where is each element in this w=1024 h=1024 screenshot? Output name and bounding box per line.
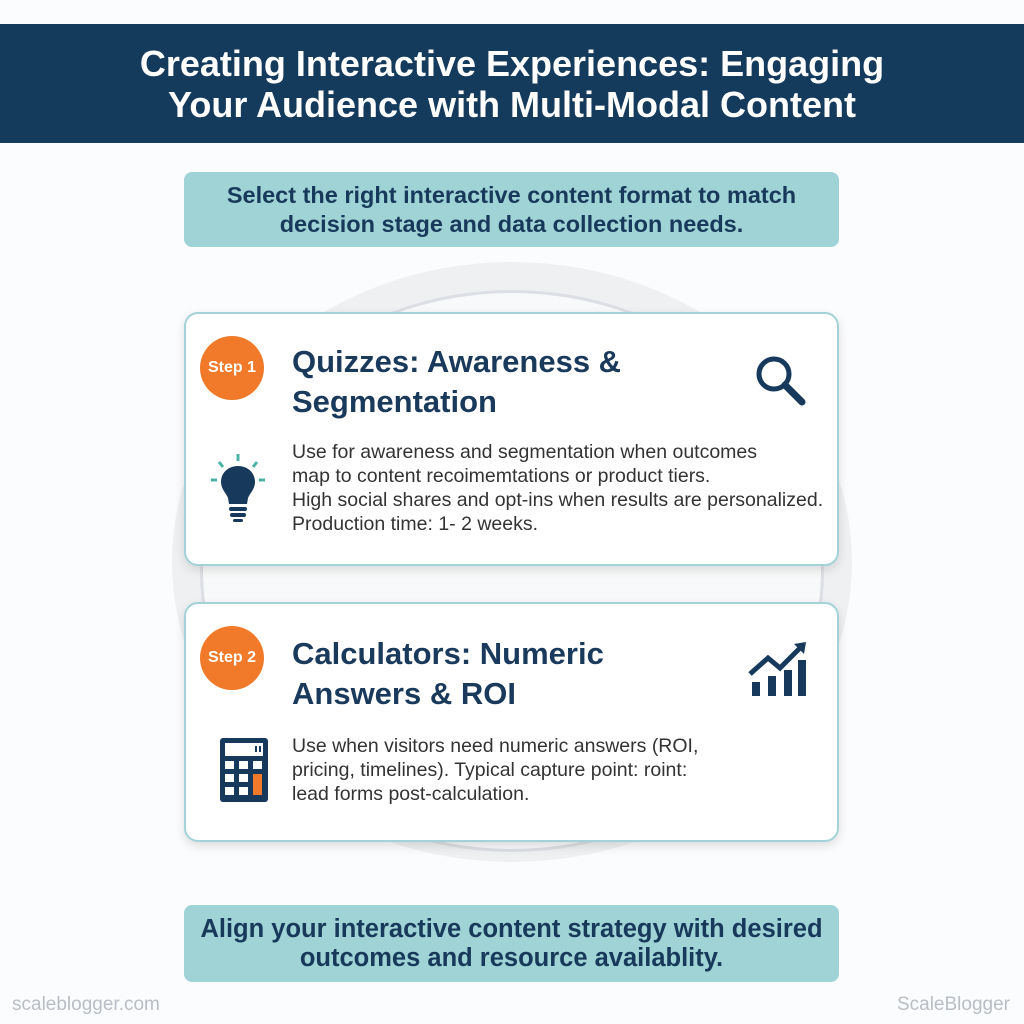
heading: quizzes: Segmentation xyxy=(292,384,497,419)
heading: calculators xyxy=(292,636,604,711)
icon: magnifier xyxy=(756,356,806,406)
text: quizzes description: Use for awareness and segmentation when outcomes xyxy=(292,441,757,463)
heading: quizzes xyxy=(292,344,621,419)
title banner: Your Audience with Multi-Modal Content xyxy=(168,84,856,125)
heading: calculators: Calculators: Numeric xyxy=(292,636,604,671)
text: quizzes description: High social shares and opt-ins when results are personalized. xyxy=(292,489,823,511)
footer right: ScaleBlogger xyxy=(897,994,1010,1015)
subtitle box: decision stage and data collection needs. xyxy=(280,211,743,237)
icon: light bulb xyxy=(211,454,265,522)
icon: calculator xyxy=(220,738,268,802)
step 2 badge xyxy=(200,626,264,690)
step 1 badge xyxy=(200,336,264,400)
bottom callout xyxy=(184,905,839,982)
icon: chart xyxy=(748,642,806,696)
text: quizzes description: map to content recoimemtations or product tiers. xyxy=(292,465,710,487)
text: quizzes description xyxy=(292,441,823,535)
panel: step 1 quizzes xyxy=(184,312,839,566)
text: calculators description: Use when visitors need numeric answers (ROI, xyxy=(292,735,698,757)
subtitle box xyxy=(184,172,839,247)
text: calculators description: pricing, timelines). Typical capture point: roint: xyxy=(292,759,687,781)
text: calculators description: lead forms post-calculation. xyxy=(292,783,529,805)
step 2 badge: Step 2 xyxy=(208,649,256,666)
subtitle box: Select the right interactive content format to match xyxy=(227,182,796,208)
heading: calculators: Answers & ROI xyxy=(292,676,516,711)
bottom callout: Align your interactive content strategy with desired xyxy=(200,915,823,943)
background circle xyxy=(172,262,852,862)
heading: quizzes: Quizzes: Awareness & xyxy=(292,344,621,379)
text: quizzes description: Production time: 1- 2 weeks. xyxy=(292,513,538,535)
bottom callout: outcomes and resource availablity. xyxy=(300,944,723,972)
footer left: scaleblogger.com xyxy=(12,994,160,1015)
title banner xyxy=(0,24,1024,143)
text: calculators description xyxy=(292,735,698,805)
panel: step 2 calculators xyxy=(184,602,839,842)
step 1 badge: Step 1 xyxy=(208,359,256,376)
title banner: Creating Interactive Experiences: Engaging xyxy=(140,43,884,84)
